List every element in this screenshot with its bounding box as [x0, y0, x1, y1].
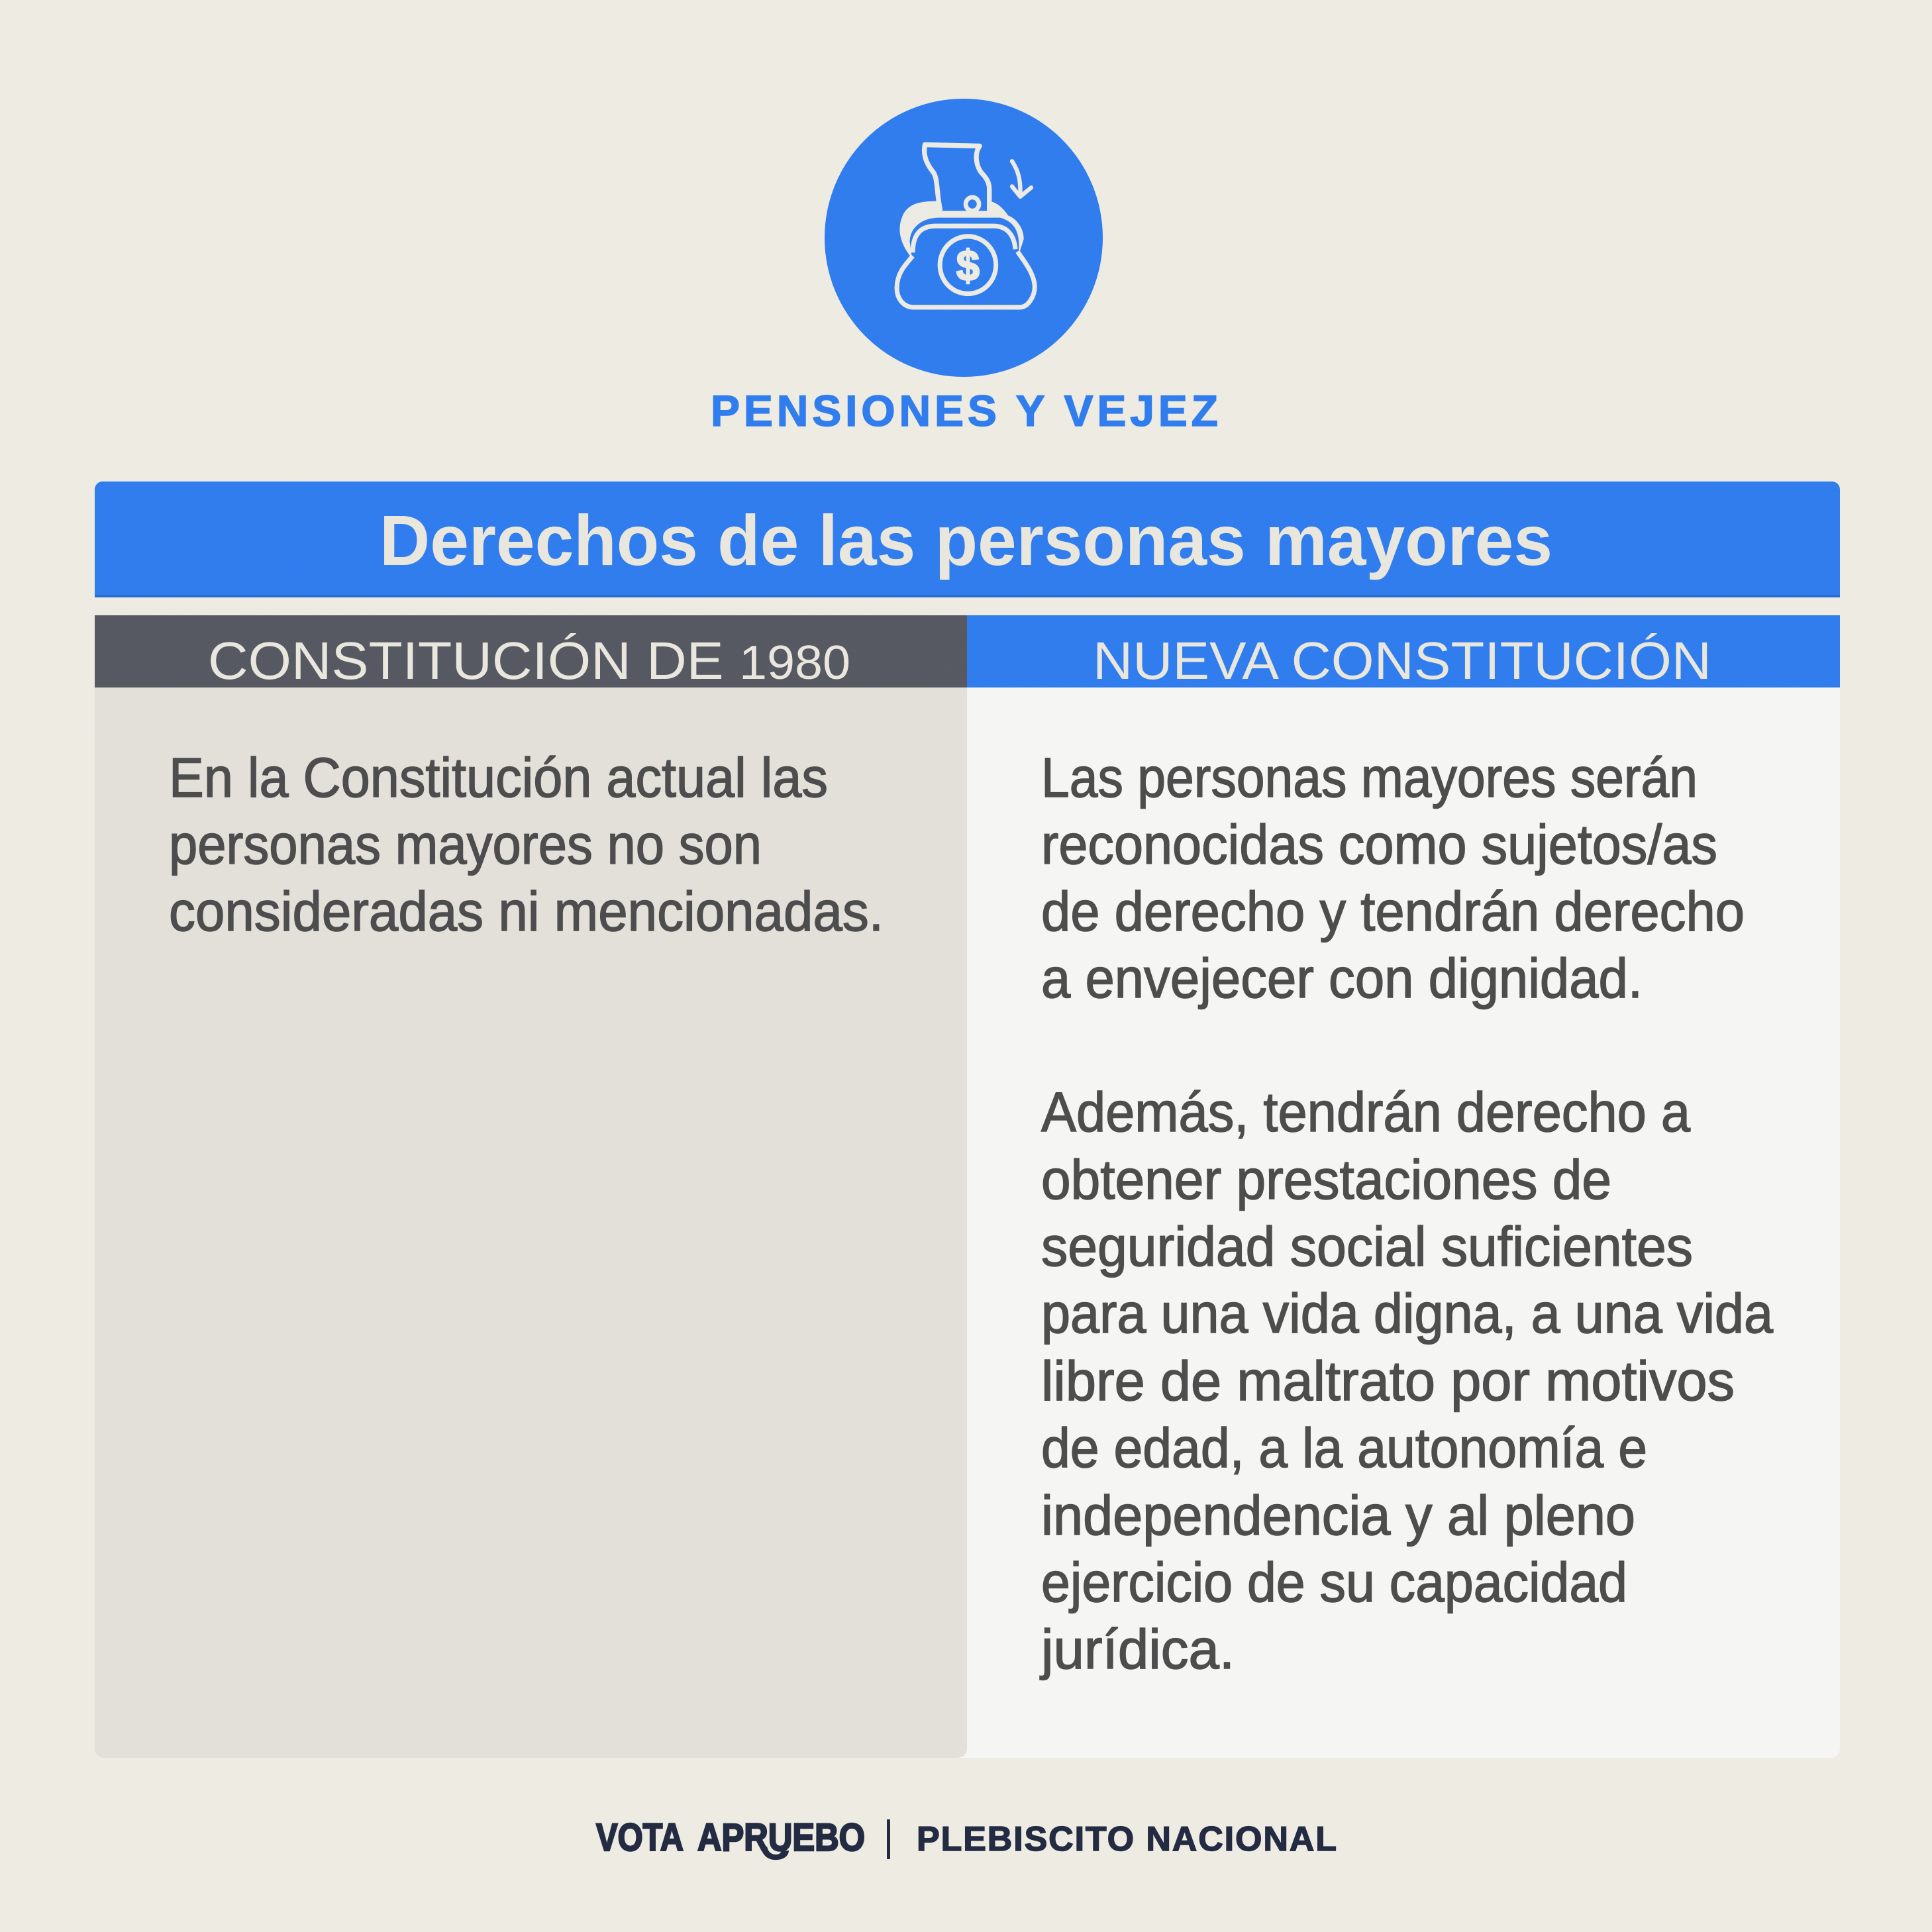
text block: right column, second paragraph: ejercicio de su capacidad — [1041, 1551, 1627, 1613]
text block: right column, second paragraph — [1039, 1081, 1773, 1680]
footer: VOTA — [596, 1816, 684, 1859]
text block: right column, first paragraph: Las personas mayores serán — [1041, 746, 1698, 809]
text block: left column: consideradas ni mencionadas. — [169, 880, 884, 942]
text block: right column, first paragraph: de derecho y tendrán derecho — [1041, 880, 1745, 942]
footer: PLEBISCITO NACIONAL — [917, 1820, 1337, 1858]
footer — [596, 1816, 1337, 1860]
text block: right column, second paragraph: jurídica. — [1039, 1618, 1235, 1680]
text block: right column, first paragraph: a envejecer con dignidad. — [1041, 947, 1643, 1009]
text block: right column, second paragraph: seguridad social suficientes — [1041, 1215, 1693, 1278]
icon: blue circle with purse: $ — [956, 241, 980, 289]
panel: Constitución de 1980 — [95, 615, 967, 1758]
title bar: Derechos de las personas mayores — [380, 500, 1552, 580]
text block: right column, second paragraph: para una vida digna, a una vida — [1041, 1282, 1773, 1345]
column header: Nueva Constitución — [967, 615, 1840, 690]
text block: right column, second paragraph: independencia y al pleno — [1041, 1484, 1635, 1547]
text block: right column, second paragraph: obtener prestaciones de — [1041, 1148, 1611, 1211]
column header: Nueva Constitución: NUEVA CONSTITUCIÓN — [1093, 631, 1711, 690]
heading: Pensiones y vejez: PENSIONES Y VEJEZ — [711, 386, 1218, 435]
text block: left column — [169, 746, 884, 942]
text block: right column, second paragraph: libre de maltrato por motivos — [1041, 1350, 1735, 1412]
text block: right column, second paragraph: de edad, a la autonomía e — [1041, 1417, 1647, 1479]
footer: APRUEBO — [697, 1816, 865, 1859]
text block: right column, first paragraph: reconocidas como sujetos/as — [1041, 813, 1717, 876]
text block: left column: personas mayores no son — [169, 813, 762, 876]
text block: right column, second paragraph: Además, tendrán derecho a — [1041, 1081, 1690, 1143]
panel: Nueva Constitución — [958, 615, 1840, 1758]
column header: Constitución de 1980 — [95, 615, 967, 690]
text block: left column: En la Constitución actual las — [169, 746, 828, 809]
text block: right column, first paragraph — [1041, 746, 1745, 1009]
icon: blue circle with purse — [825, 99, 1103, 377]
column header: Constitución de 1980: CONSTITUCIÓN DE 1980 — [208, 631, 850, 690]
title bar — [95, 482, 1840, 597]
